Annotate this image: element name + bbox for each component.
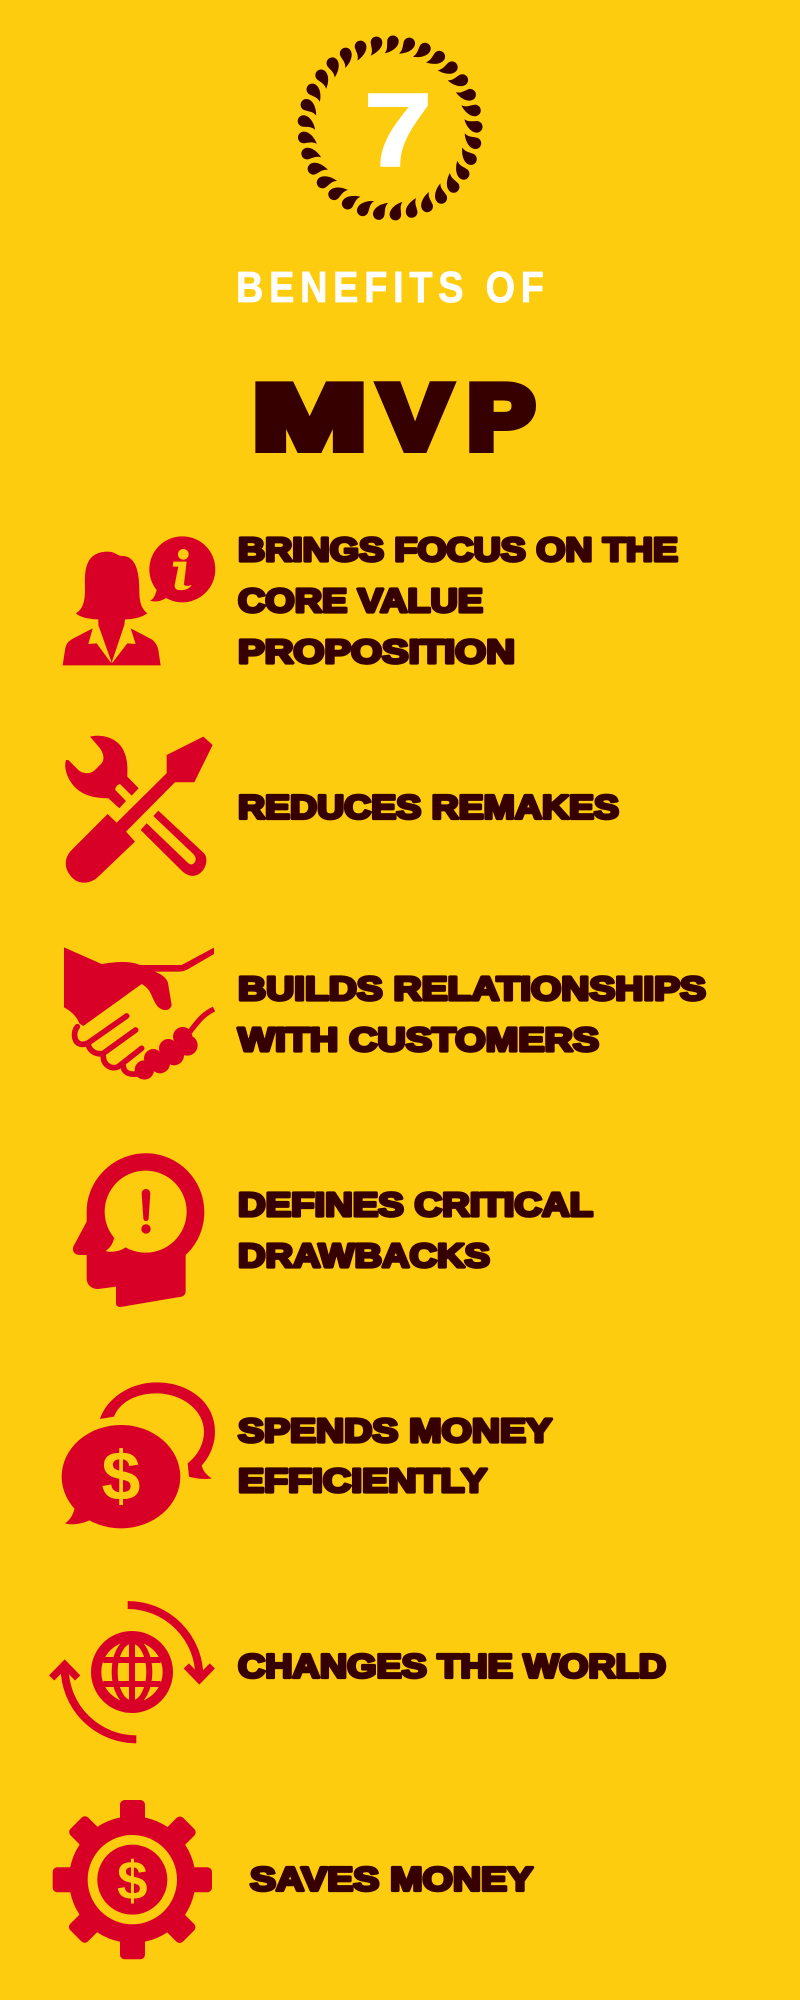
text: defines critical drawbacks (238, 1186, 593, 1274)
text: saves money: SAVES MONEY (250, 1860, 533, 1898)
icon: gear with dollar: $ (117, 1849, 148, 1911)
icon: tools (65, 736, 213, 883)
text: brings focus: BRINGS FOCUS ON THE (238, 531, 678, 568)
heading: MVP: M (253, 368, 366, 468)
icon: ring of drops (297, 35, 483, 221)
text: defines critical drawbacks: DEFINES CRITICAL (238, 1186, 593, 1223)
text: reduces remakes: REDUCES REMAKES (238, 788, 619, 826)
icon: gear with dollar (53, 1800, 212, 1959)
icon: globe with arrows (52, 1605, 212, 1739)
text: builds relationships: BUILDS RELATIONSHIPS (238, 970, 706, 1007)
text: spends money: SPENDS MONEY (238, 1412, 552, 1449)
icon: woman with info bubble (63, 536, 215, 665)
heading: benefits of: BENEFITS OF (236, 262, 544, 312)
icon: money speech bubble (62, 1382, 215, 1528)
text: builds relationships: WITH CUSTOMERS (238, 1021, 599, 1058)
text: changes the world: CHANGES THE WORLD (238, 1648, 666, 1684)
icon: handshake (64, 947, 214, 1080)
icon: money speech bubble: $ (102, 1437, 140, 1515)
text: defines critical drawbacks: DRAWBACKS (238, 1237, 490, 1274)
text: brings focus: CORE VALUE (238, 582, 483, 619)
text: builds relationships (238, 970, 706, 1058)
text: brings focus: PROPOSITION (238, 633, 515, 670)
number 7: 7 (364, 73, 432, 189)
heading: MVP: V (380, 368, 450, 468)
icon: head with alert (73, 1153, 204, 1307)
text: brings focus (238, 531, 678, 670)
text: spends money: EFFICIENTLY (238, 1462, 487, 1499)
heading: MVP: P (468, 368, 534, 468)
text: spends money (238, 1412, 552, 1499)
